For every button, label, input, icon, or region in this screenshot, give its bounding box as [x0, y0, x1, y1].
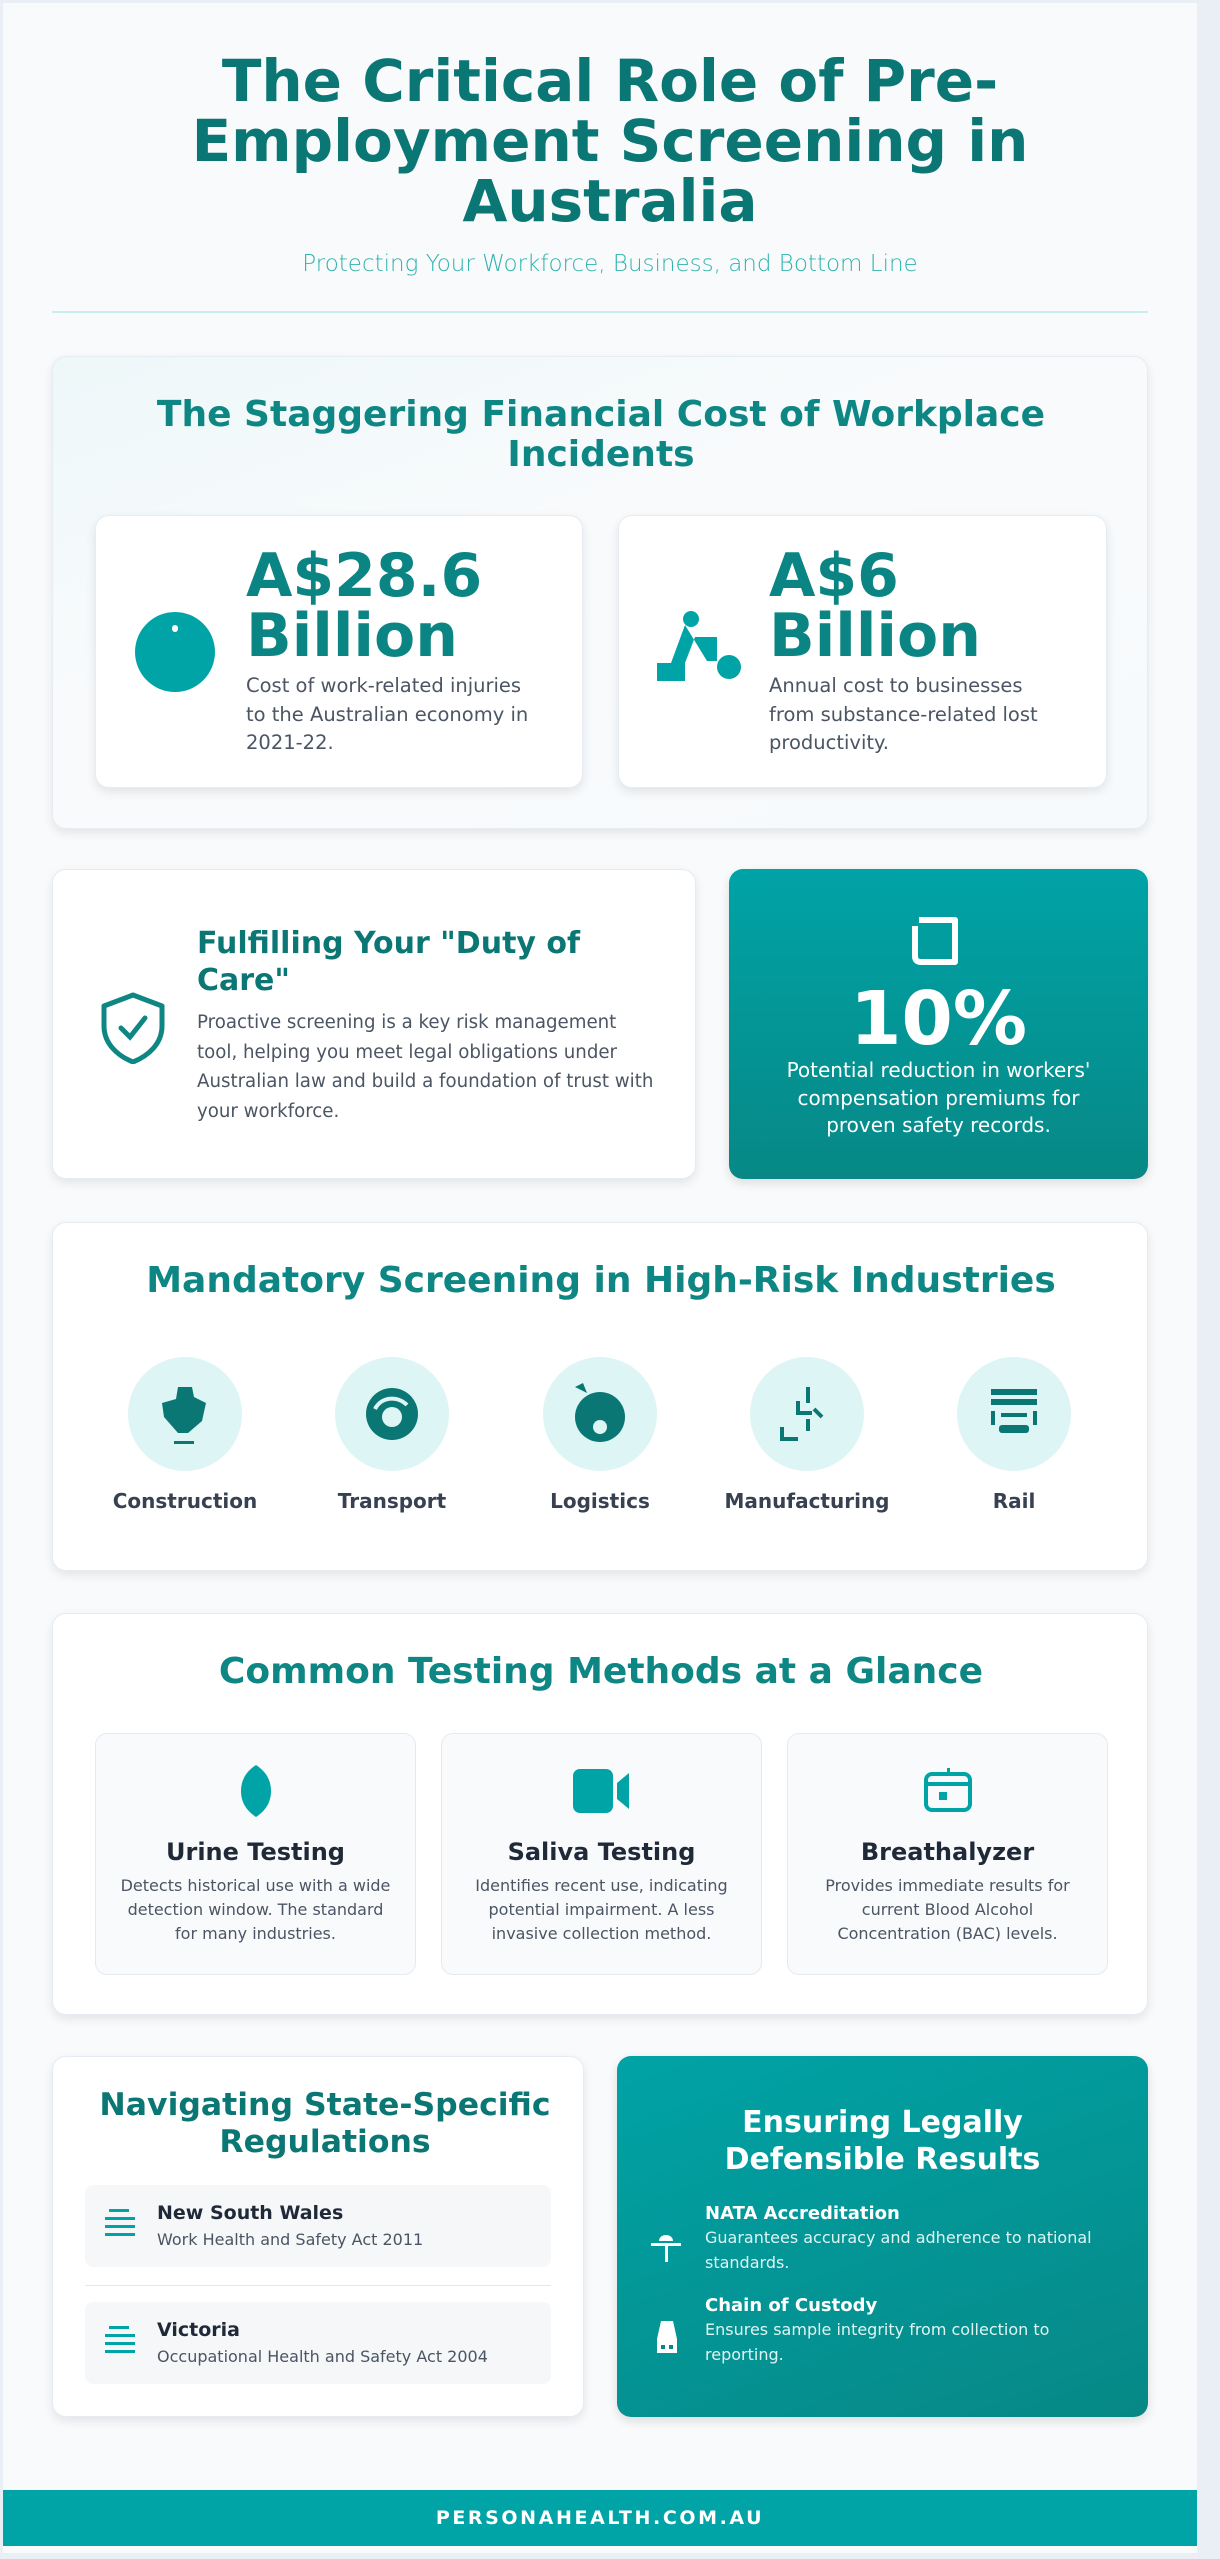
title — [192, 47, 1028, 235]
method: breathalyzer: Concentration (BAC) levels. — [837, 1924, 1058, 1943]
stat text: productivity. — [769, 731, 889, 754]
duty text: tool, helping you meet legal obligations under — [197, 1042, 617, 1062]
method: breathalyzer — [787, 1733, 1108, 1975]
method: saliva: invasive collection method. — [492, 1924, 711, 1943]
stat text: A$6 — [769, 541, 899, 611]
industry: manufacturing: Manufacturing — [724, 1489, 890, 1513]
state: NSW: New South Wales — [157, 2202, 343, 2224]
duty text — [197, 926, 653, 1122]
title: Employment Screening in — [192, 107, 1028, 175]
duty text: your workforce. — [197, 1100, 339, 1122]
icon: document — [912, 917, 958, 965]
title: The Critical Role of Pre- — [222, 47, 998, 115]
method: saliva — [441, 1733, 762, 1975]
duty text: Fulfilling Your "Duty of — [197, 926, 580, 961]
heading: financial cost: The Staggering Financial Cost of Workplace — [157, 394, 1045, 435]
item: chain of custody — [657, 2295, 1049, 2364]
stat text: Billion — [769, 601, 981, 671]
method: saliva: potential impairment. A less — [488, 1900, 714, 1919]
heading: state regulations: Regulations — [219, 2124, 431, 2160]
panel: legally defensible — [617, 2056, 1148, 2417]
item: chain of custody: reporting. — [705, 2344, 784, 2364]
heading: legally defensible: Defensible Results — [725, 2142, 1040, 2177]
title: Australia — [462, 167, 758, 235]
stat card: 28.6 billion — [95, 515, 583, 788]
industry: construction — [113, 1357, 257, 1513]
heading: industries: Mandatory Screening in High-Risk Industries — [146, 1260, 1056, 1301]
heading: state regulations: Navigating State-Specific — [99, 2087, 551, 2123]
industry: manufacturing — [724, 1357, 890, 1513]
method: urine: Urine Testing — [166, 1838, 345, 1866]
panel: industries — [52, 1222, 1148, 1571]
state: Victoria: Occupational Health and Safety Act 2004 — [157, 2347, 488, 2366]
state: NSW — [85, 2185, 551, 2267]
state: Victoria — [85, 2302, 551, 2384]
heading: testing methods: Common Testing Methods at a Glance — [219, 1651, 983, 1692]
stat: 10%: 10% — [850, 976, 1027, 1062]
stat text: Billion — [246, 601, 458, 671]
stat text: from substance-related lost — [769, 702, 1038, 726]
heading: legally defensible — [725, 2105, 1040, 2177]
heading: legally defensible: Ensuring Legally — [742, 2105, 1023, 2140]
item: NATA — [651, 2203, 1092, 2272]
heading: financial cost: Incidents — [507, 434, 695, 475]
method: saliva: Identifies recent use, indicating — [475, 1876, 728, 1895]
industry: construction: Construction — [113, 1489, 257, 1513]
icon: coin — [135, 612, 215, 692]
panel: state regulations — [52, 2056, 584, 2417]
state: NSW: Work Health and Safety Act 2011 — [157, 2230, 423, 2249]
duty text: Care" — [197, 963, 290, 998]
method: urine: Detects historical use with a wide — [121, 1876, 390, 1895]
method: breathalyzer: Breathalyzer — [861, 1838, 1034, 1866]
method: breathalyzer: current Blood Alcohol — [862, 1900, 1033, 1919]
stat text: to the Australian economy in — [246, 702, 528, 726]
item: NATA: standards. — [705, 2252, 789, 2272]
industry: rail — [957, 1357, 1071, 1513]
stat card: 6 billion — [618, 515, 1107, 788]
panel: duty of care — [52, 869, 696, 1179]
industry: transport — [335, 1357, 449, 1513]
stat text: Annual cost to businesses — [769, 674, 1023, 697]
industry: logistics: Logistics — [550, 1489, 650, 1513]
item: NATA: Guarantees accuracy and adherence to national — [705, 2228, 1092, 2247]
panel: testing methods — [52, 1613, 1148, 2015]
stat text — [246, 541, 528, 754]
industry: rail: Rail — [993, 1489, 1035, 1513]
icon: shield — [102, 992, 164, 1064]
method: urine: for many industries. — [175, 1924, 336, 1943]
item: NATA: NATA Accreditation — [705, 2203, 900, 2224]
panel: 10% premium reduction — [729, 869, 1148, 1179]
stat description: proven safety records. — [826, 1113, 1051, 1137]
item: chain of custody: Chain of Custody — [705, 2295, 877, 2316]
stat text: Cost of work-related injuries — [246, 674, 521, 697]
industry: transport: Transport — [338, 1489, 446, 1513]
footer: PERSONAHEALTH.COM.AU — [436, 2507, 764, 2529]
duty text: Proactive screening is a key risk management — [197, 1012, 616, 1033]
duty text: Australian law and build a foundation of trust with — [197, 1071, 653, 1092]
stat text: 2021-22. — [246, 731, 334, 754]
state: Victoria: Victoria — [157, 2319, 240, 2341]
heading: state regulations — [99, 2087, 551, 2160]
panel: financial cost — [52, 356, 1148, 829]
stat description: Potential reduction in workers' — [787, 1058, 1090, 1082]
method: urine: detection window. The standard — [128, 1900, 383, 1919]
stat text: A$28.6 — [246, 541, 482, 611]
industry: logistics — [543, 1357, 657, 1513]
stat description: compensation premiums for — [798, 1086, 1080, 1110]
method: urine — [95, 1733, 416, 1975]
stat description — [787, 1058, 1090, 1137]
item: chain of custody: Ensures sample integrity from collection to — [705, 2320, 1049, 2339]
heading: financial cost — [157, 394, 1045, 475]
footer — [3, 2490, 1197, 2546]
subtitle: Protecting Your Workforce, Business, and Bottom Line — [302, 251, 918, 277]
icon: worker — [657, 611, 741, 681]
stat text — [769, 541, 1038, 754]
method: breathalyzer: Provides immediate results for — [825, 1876, 1070, 1895]
method: saliva: Saliva Testing — [508, 1838, 695, 1866]
